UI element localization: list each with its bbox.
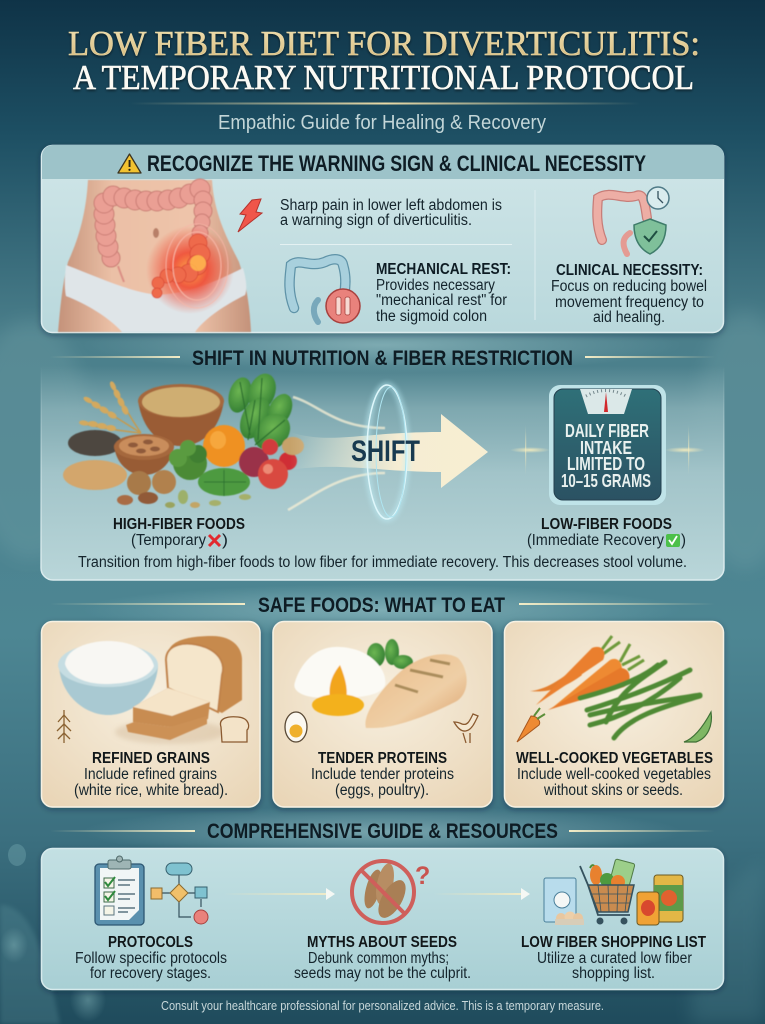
icon: wheat — [57, 710, 71, 743]
section heading: shift: SHIFT IN NUTRITION & FIBER RESTRICTION — [192, 347, 573, 370]
clinical necessity text: CLINICAL NECESSITY: — [556, 262, 703, 279]
icon: carrot — [517, 708, 545, 742]
card: refined grains — [42, 622, 260, 807]
vegetables text: without skins or seeds. — [543, 782, 683, 799]
clinical necessity text — [551, 262, 707, 326]
protocols text — [75, 934, 227, 982]
tender proteins text: Include tender proteins — [311, 766, 454, 783]
warning text: Sharp pain in lower left abdomen is — [280, 197, 502, 214]
subtitle: Empathic Guide for Healing & Recovery — [218, 112, 546, 134]
mechanical rest text: MECHANICAL REST: — [376, 261, 511, 278]
mechanical rest text: Provides necessary — [376, 277, 495, 294]
scale: daily fiber intake — [549, 385, 666, 505]
label: low-fiber foods: LOW-FIBER FOODS — [541, 516, 672, 533]
vegetables text — [516, 750, 713, 799]
icon: glowing ring — [367, 385, 407, 519]
transition text: Transition from high-fiber foods to low fiber for immediate recovery. This decreases stool volume. — [78, 554, 687, 571]
tender proteins text: TENDER PROTEINS — [318, 750, 447, 767]
icon: bread — [220, 717, 249, 742]
protocols text: for recovery stages. — [90, 965, 211, 982]
label: high-fiber foods: (Temporary — [131, 532, 206, 549]
panel: guide and resources — [42, 848, 724, 990]
mechanical rest text — [376, 261, 511, 325]
warning text — [280, 197, 502, 229]
mechanical rest text: "mechanical rest" for — [376, 292, 507, 309]
label: low-fiber foods — [527, 516, 686, 549]
myths text: seeds may not be the culprit. — [294, 965, 471, 982]
clinical necessity text: Focus on reducing bowel — [551, 278, 707, 295]
shopping list text: Utilize a curated low fiber — [537, 950, 692, 967]
section heading: guide: COMPREHENSIVE GUIDE & RESOURCES — [207, 820, 558, 843]
label: low-fiber foods: (Immediate Recovery — [527, 532, 664, 549]
icon: no seeds — [352, 861, 430, 923]
icon: colon, clock and shield — [597, 187, 669, 254]
shopping list text: LOW FIBER SHOPPING LIST — [521, 934, 706, 951]
illustration: torso with inflamed colon — [58, 179, 251, 332]
protocols text: PROTOCOLS — [108, 934, 193, 951]
vegetables text: WELL-COOKED VEGETABLES — [516, 750, 713, 767]
card: well-cooked vegetables — [504, 622, 724, 807]
label: high-fiber foods: ) — [222, 532, 228, 549]
panel heading: RECOGNIZE THE WARNING SIGN & CLINICAL NECESSITY — [147, 151, 646, 176]
arrow: shift — [288, 397, 488, 510]
myths text: MYTHS ABOUT SEEDS — [307, 934, 457, 951]
clinical necessity text: movement frequency to — [555, 294, 704, 311]
icon: clipboard checklist — [95, 856, 144, 925]
icon: lightning bolt — [238, 199, 262, 232]
illustration: egg and chicken — [294, 639, 467, 728]
sparkle glow — [510, 425, 705, 475]
panel: warning sign and clinical necessity — [42, 145, 724, 332]
panel: shift in nutrition — [41, 366, 724, 580]
scale text: 10–15 GRAMS — [561, 471, 651, 491]
icon: hen — [454, 714, 478, 743]
warning text: a warning sign of diverticulitis. — [280, 212, 472, 229]
label: high-fiber foods: HIGH-FIBER FOODS — [113, 516, 245, 533]
shopping list text — [521, 934, 706, 982]
footer disclaimer: Consult your healthcare professional for personalized advice. This is a temporary measure. — [161, 999, 604, 1013]
icon: no seeds: ? — [415, 862, 430, 890]
arrow: myths to shopping — [434, 888, 530, 900]
icon: shopping cart and groceries — [544, 859, 683, 925]
arrow: protocols to myths — [224, 888, 335, 900]
shift label: SHIFT — [351, 435, 420, 468]
protocols text: Follow specific protocols — [75, 950, 227, 967]
scale gauge — [580, 389, 632, 414]
title: LOW FIBER DIET FOR DIVERTICULITIS: — [68, 24, 700, 63]
scale text: INTAKE — [580, 438, 632, 458]
illustration: carrots and green beans — [530, 636, 700, 738]
shopping list text: shopping list. — [572, 965, 655, 982]
tender proteins text: (eggs, poultry). — [335, 782, 429, 799]
refined grains text: Include refined grains — [84, 766, 217, 783]
tender proteins text — [311, 750, 454, 799]
myths text — [294, 934, 471, 982]
scale text: LIMITED TO — [567, 454, 645, 474]
refined grains text: REFINED GRAINS — [92, 750, 210, 767]
icon: egg — [285, 712, 307, 742]
scale text: DAILY FIBER — [565, 421, 649, 441]
icon: warning triangle — [118, 154, 141, 173]
vegetables text: Include well-cooked vegetables — [517, 766, 711, 783]
refined grains text — [74, 750, 228, 799]
label: high-fiber foods — [113, 516, 245, 549]
label: low-fiber foods: ) — [681, 532, 686, 549]
icon: peas — [684, 712, 711, 742]
title — [68, 24, 700, 97]
icon: colon with pause — [290, 259, 360, 323]
illustration: rice and bread — [58, 636, 242, 744]
scale text — [561, 421, 651, 491]
section heading: safe foods: SAFE FOODS: WHAT TO EAT — [258, 594, 505, 617]
icon: flowchart — [151, 863, 208, 924]
card: tender proteins — [273, 622, 492, 807]
refined grains text: (white rice, white bread). — [74, 782, 228, 799]
title: A TEMPORARY NUTRITIONAL PROTOCOL — [73, 58, 694, 97]
illustration: high-fiber foods — [63, 370, 304, 508]
myths text: Debunk common myths; — [308, 950, 449, 967]
clinical necessity text: aid healing. — [593, 309, 665, 326]
mechanical rest text: the sigmoid colon — [376, 308, 487, 325]
